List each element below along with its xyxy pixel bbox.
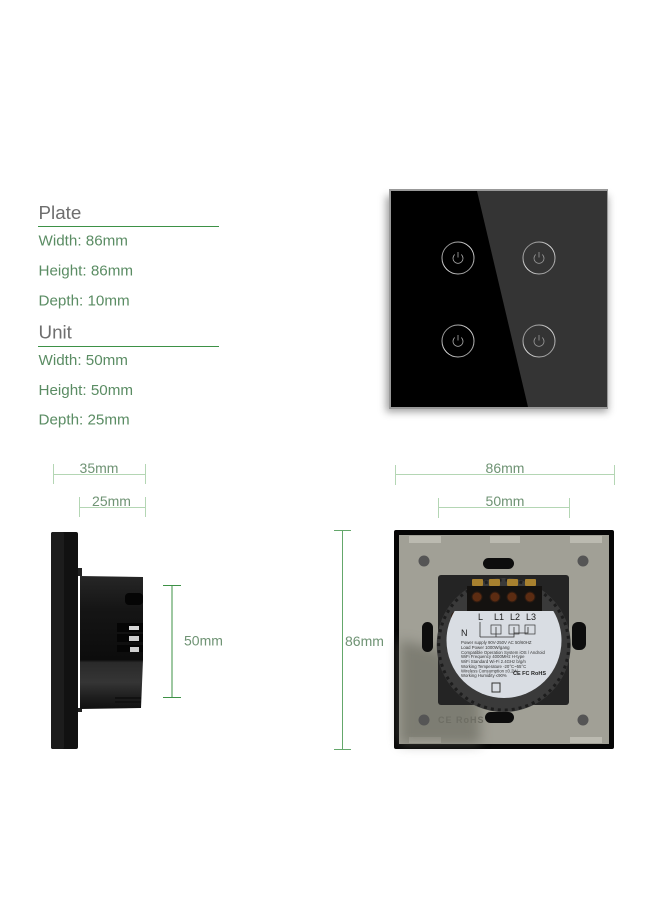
back view of switch: CE FC RoHS [513, 671, 546, 677]
back frame [394, 530, 614, 749]
back view of switch: Wireless Consumption ≤0.2W [461, 668, 519, 674]
back view of switch: Power supply 90V-250V AC 50/60HZ [461, 640, 532, 645]
plate depth: Depth: 10mm [38, 292, 130, 310]
back view of switch: N [461, 628, 468, 638]
dimension: 86mm height [334, 530, 384, 750]
unit width: Width: 50mm [38, 352, 128, 369]
touch button top right [523, 242, 555, 274]
terminal block [467, 586, 542, 611]
touch button bottom left [442, 325, 474, 357]
dimension: side unit 50mm [163, 586, 223, 698]
heading: Plate: Plate [38, 202, 81, 223]
dimension: side unit 50mm: 50mm [184, 632, 223, 648]
unit height: Height: 50mm [38, 382, 133, 399]
back view of switch: WiFi Standard Wi-Fi 2.4GHz b/g/n [461, 659, 527, 664]
back view of switch: Compatible Operation System iOS / Android [461, 650, 545, 655]
white label with wiring [446, 611, 562, 698]
dimension: 35mm: 35mm [80, 460, 118, 476]
back view of switch: L3 [526, 612, 536, 622]
embossed mark: CE RoHS [438, 715, 485, 725]
dimension: 25mm [80, 493, 146, 517]
side unit body [80, 576, 143, 709]
front view of glass switch panel [386, 189, 608, 412]
back view of switch: Working Temperature -20°C~55°C [461, 664, 526, 669]
dimension: 86mm height: 86mm [345, 633, 384, 649]
mounting slots [483, 558, 514, 569]
back view of switch: Load Power 1000W/gang [461, 645, 510, 650]
dimension: 35mm [54, 460, 146, 484]
dimension: 86mm width [396, 460, 614, 485]
dimension: 50mm width [438, 493, 570, 518]
back view of switch: WiFi Frequency 4000MHz H-type [461, 654, 525, 659]
dimension: 50mm width: 50mm [486, 493, 524, 509]
mounting holes [418, 556, 430, 566]
back view of switch: L2 [510, 612, 520, 622]
specification text: plate [38, 202, 219, 310]
dimension: 86mm width: 86mm [486, 460, 524, 476]
back view of switch [394, 530, 614, 749]
grey mounting plate [399, 535, 609, 744]
back view of switch: L [478, 612, 483, 622]
plate width: Width: 86mm [38, 232, 128, 250]
side view of switch [51, 532, 143, 749]
plate height: Height: 86mm [38, 262, 133, 280]
dimension: 25mm: 25mm [92, 493, 131, 509]
glass reflection [477, 191, 607, 407]
touch button bottom right [523, 325, 555, 357]
unit depth: Depth: 25mm [38, 412, 130, 428]
back view of switch: Working Humidity ≤90% [461, 673, 507, 678]
touch button top left [442, 242, 474, 274]
heading: Unit: Unit [38, 322, 73, 342]
back view of switch: L1 [494, 612, 504, 622]
black module [438, 575, 569, 705]
specification text: unit [38, 322, 219, 428]
side plate [51, 532, 78, 749]
